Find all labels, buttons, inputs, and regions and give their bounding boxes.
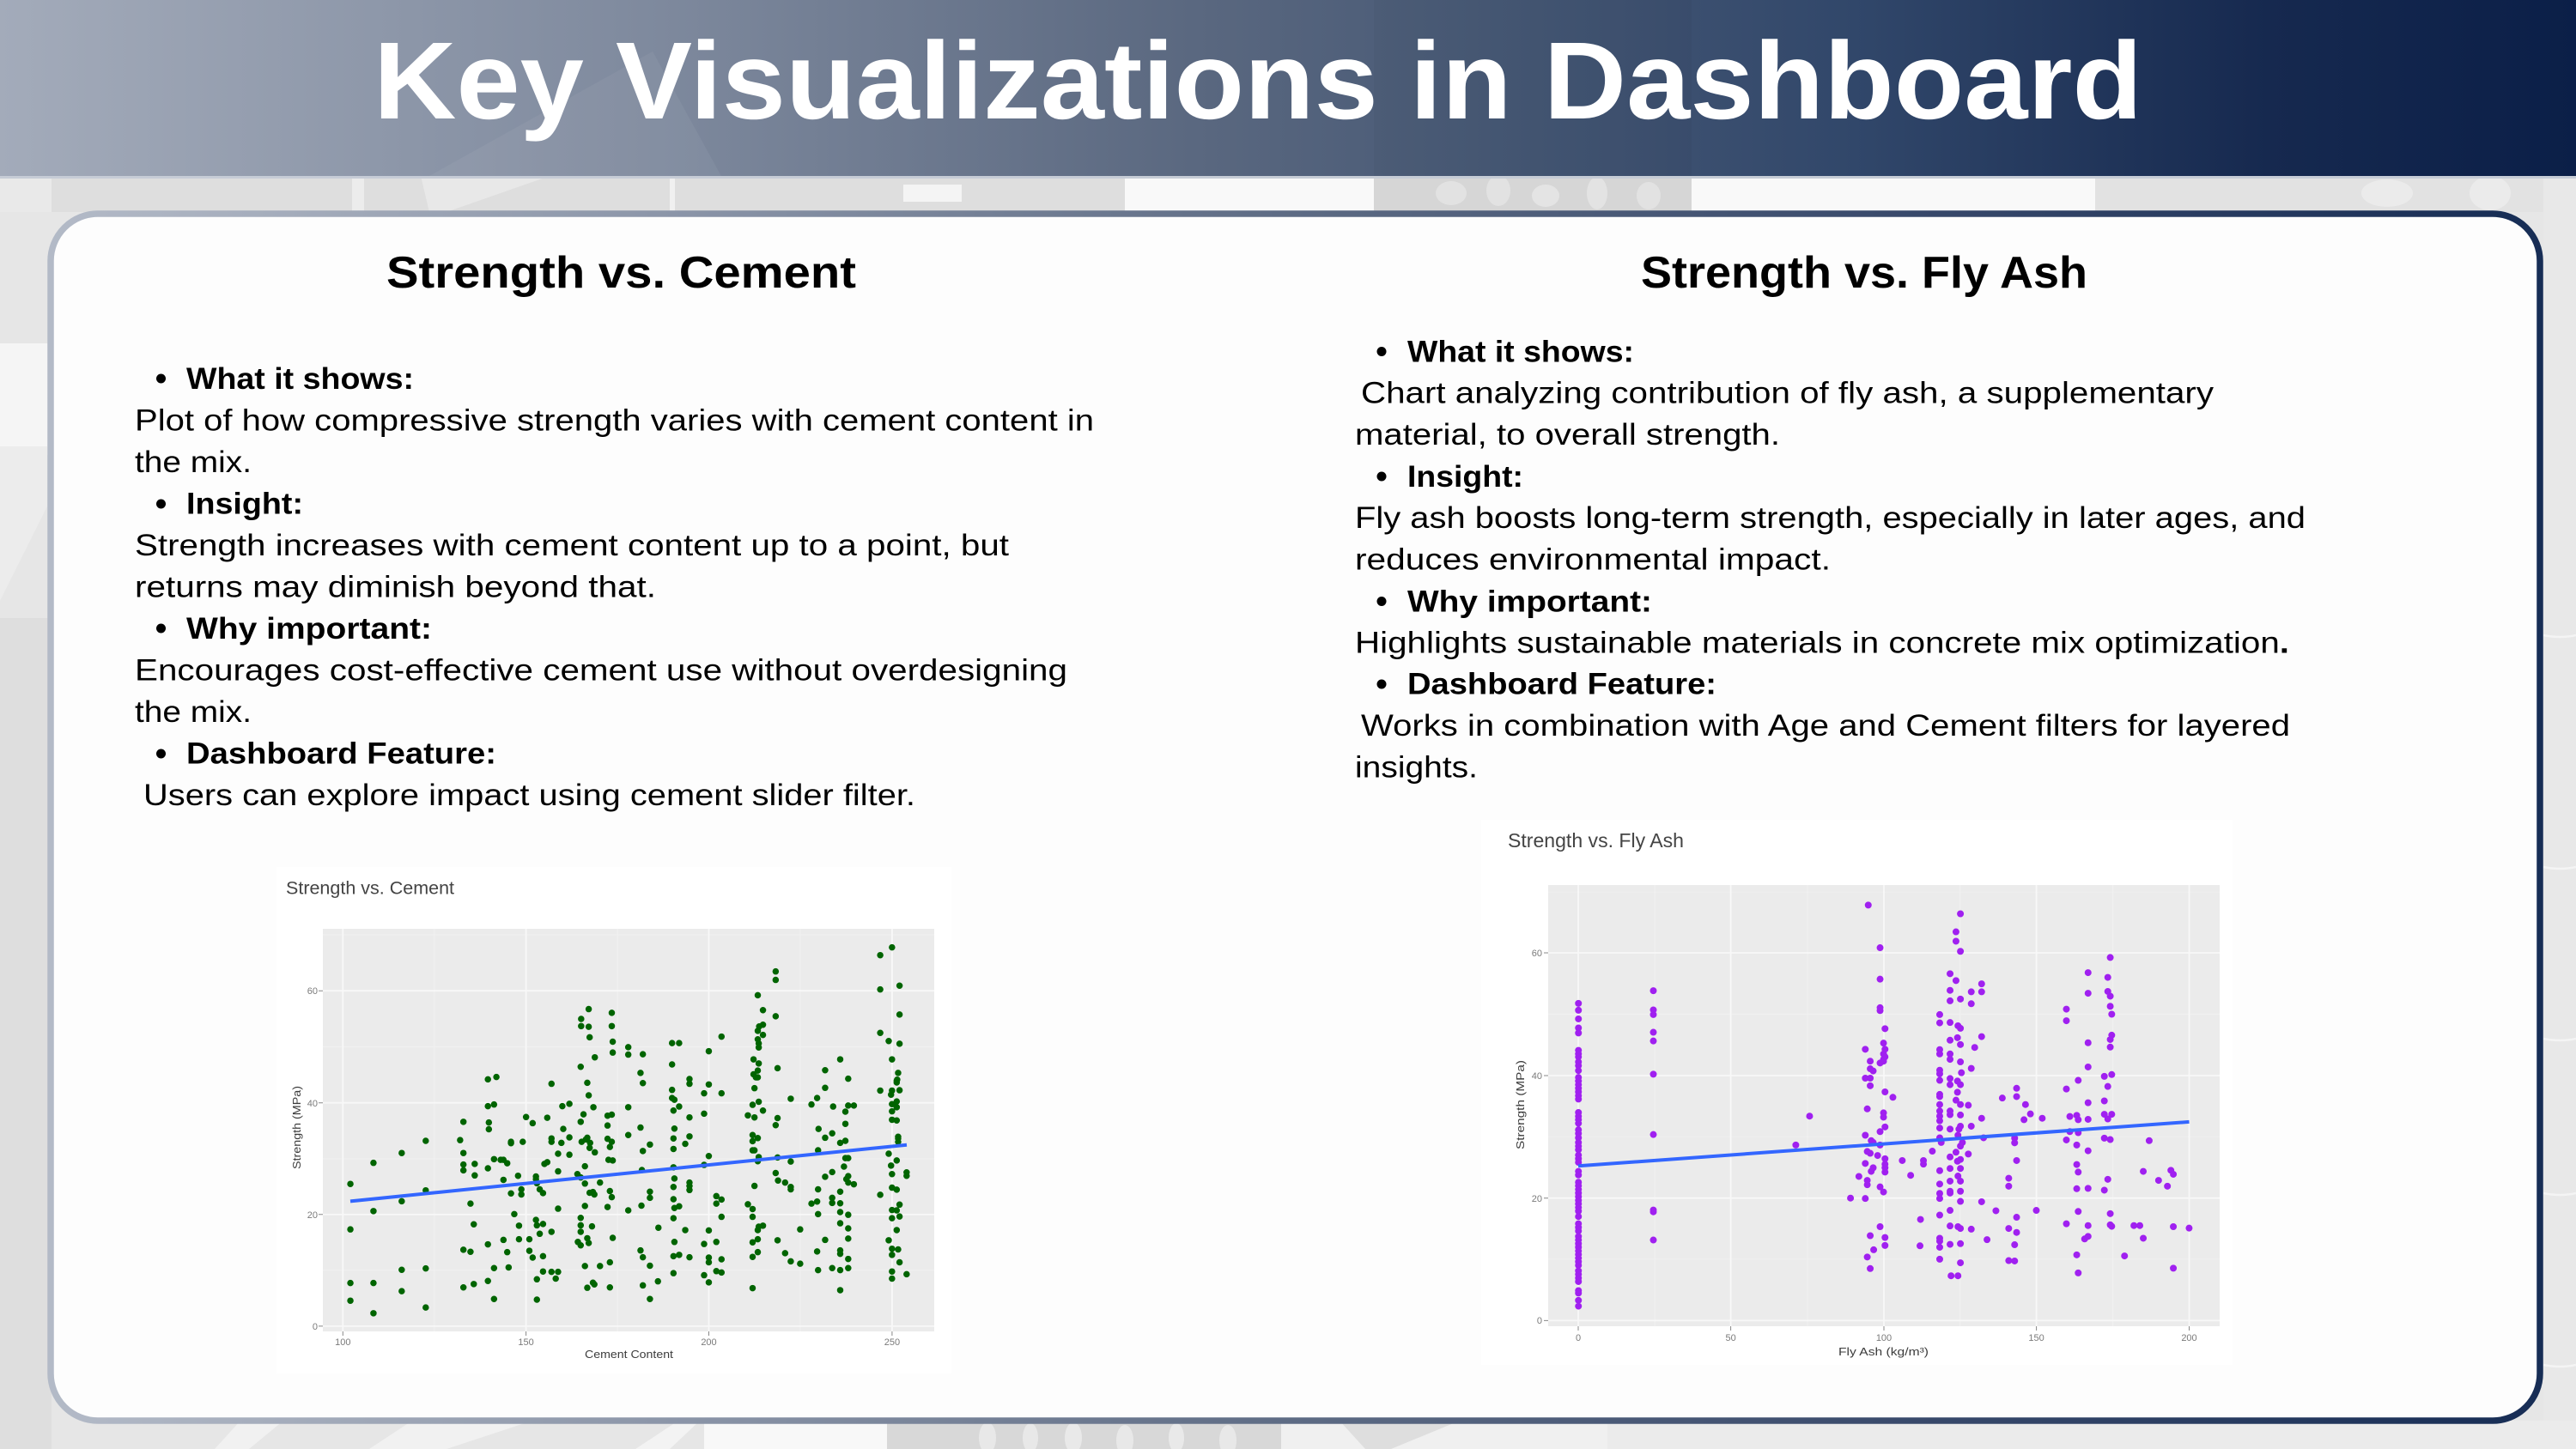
- axis ticks and labels: 20: [307, 1210, 318, 1221]
- chart title: Strength vs. Fly Ash: [1508, 829, 1684, 852]
- heading: Strength vs. Cement: Strength vs. Cement: [386, 248, 856, 298]
- text block: cement bullets: returns may diminish beyond that.: [135, 570, 656, 604]
- text block: cement bullets: Users can explore impact using cement slider filter.: [143, 779, 915, 812]
- axis ticks and labels: 50: [1725, 1333, 1736, 1343]
- text block: fly ash bullets: Works in combination with Age and Cement filters for layered: [1361, 709, 2290, 743]
- text block: cement bullets: Plot of how compressive strength varies with cement content in: [135, 403, 1094, 438]
- text block: cement bullets: Encourages cost-effective cement use without overdesigning: [135, 654, 1067, 687]
- text block: fly ash bullets: material, to overall strength.: [1355, 418, 1780, 452]
- axis ticks and labels: 40: [1532, 1071, 1542, 1082]
- axis ticks and labels: Cement Content: [585, 1348, 673, 1361]
- trend line: [350, 1145, 907, 1201]
- data points: [1578, 905, 2189, 1307]
- axis ticks and labels: Strength (MPa): [1514, 1060, 1527, 1149]
- text block: fly ash bullets: [1355, 335, 2306, 785]
- trend line: [1578, 1122, 2190, 1166]
- axis ticks and labels: 0: [1537, 1316, 1542, 1326]
- text block: cement bullets: [135, 362, 1094, 812]
- text block: fly ash bullets: What it shows:: [1407, 335, 1634, 369]
- text block: fly ash bullets: Chart analyzing contribution of fly ash, a supplementary: [1361, 377, 2215, 410]
- plot area: [323, 929, 934, 1331]
- axis ticks and labels: 100: [335, 1337, 350, 1348]
- text block: cement bullets: Insight:: [186, 488, 303, 520]
- axis ticks and labels: 0: [313, 1322, 318, 1332]
- axis ticks and labels: 20: [1532, 1194, 1542, 1204]
- axis ticks and labels: [290, 986, 900, 1361]
- chart title: Strength vs. Cement: [286, 879, 454, 898]
- text block: fly ash bullets: Fly ash boosts long-term strength, especially in later ages, and: [1355, 501, 2306, 535]
- axis ticks and labels: 60: [1532, 949, 1542, 959]
- axis ticks and labels: 60: [307, 986, 318, 997]
- axis ticks and labels: 0: [1576, 1333, 1581, 1343]
- title: Key Visualizations in Dashboard: [374, 20, 2142, 142]
- axis ticks and labels: 150: [518, 1337, 534, 1348]
- axis ticks and labels: 200: [2181, 1333, 2197, 1343]
- plot area: [1548, 885, 2220, 1326]
- text block: cement bullets: the mix.: [135, 695, 252, 729]
- text block: fly ash bullets: reduces environmental impact.: [1355, 543, 1831, 577]
- text block: cement bullets: Why important:: [186, 612, 432, 646]
- data points: [350, 948, 907, 1313]
- axis ticks and labels: Fly Ash (kg/m³): [1838, 1345, 1929, 1358]
- text block: cement bullets: the mix.: [135, 446, 252, 479]
- text block: fly ash bullets: Dashboard Feature:: [1407, 668, 1716, 701]
- axis ticks and labels: [1514, 949, 2197, 1358]
- axis ticks and labels: 40: [307, 1099, 318, 1109]
- text block: fly ash bullets: Insight:: [1407, 460, 1523, 494]
- axis ticks and labels: 150: [2028, 1333, 2044, 1343]
- text block: cement bullets: What it shows:: [186, 362, 414, 396]
- text block: fly ash bullets: Highlights sustainable materials in concrete mix optimization .: [1355, 627, 2289, 660]
- header banner: [0, 0, 2576, 179]
- text block: cement bullets: Dashboard Feature:: [186, 737, 496, 771]
- text block: fly ash bullets: Why important:: [1407, 585, 1652, 618]
- axis ticks and labels: 100: [1876, 1333, 1892, 1343]
- text block: fly ash bullets: insights.: [1355, 750, 1478, 785]
- axis ticks and labels: 200: [701, 1337, 717, 1348]
- scatter chart: strength vs fly ash: [1481, 820, 2233, 1365]
- text block: cement bullets: Strength increases with cement content up to a point, but: [135, 529, 1009, 562]
- heading: Strength vs. Fly Ash: Strength vs. Fly Ash: [1641, 248, 2087, 298]
- axis ticks and labels: Strength (MPa): [290, 1086, 303, 1169]
- scatter chart: strength vs cement: [276, 867, 951, 1373]
- axis ticks and labels: 250: [884, 1337, 900, 1348]
